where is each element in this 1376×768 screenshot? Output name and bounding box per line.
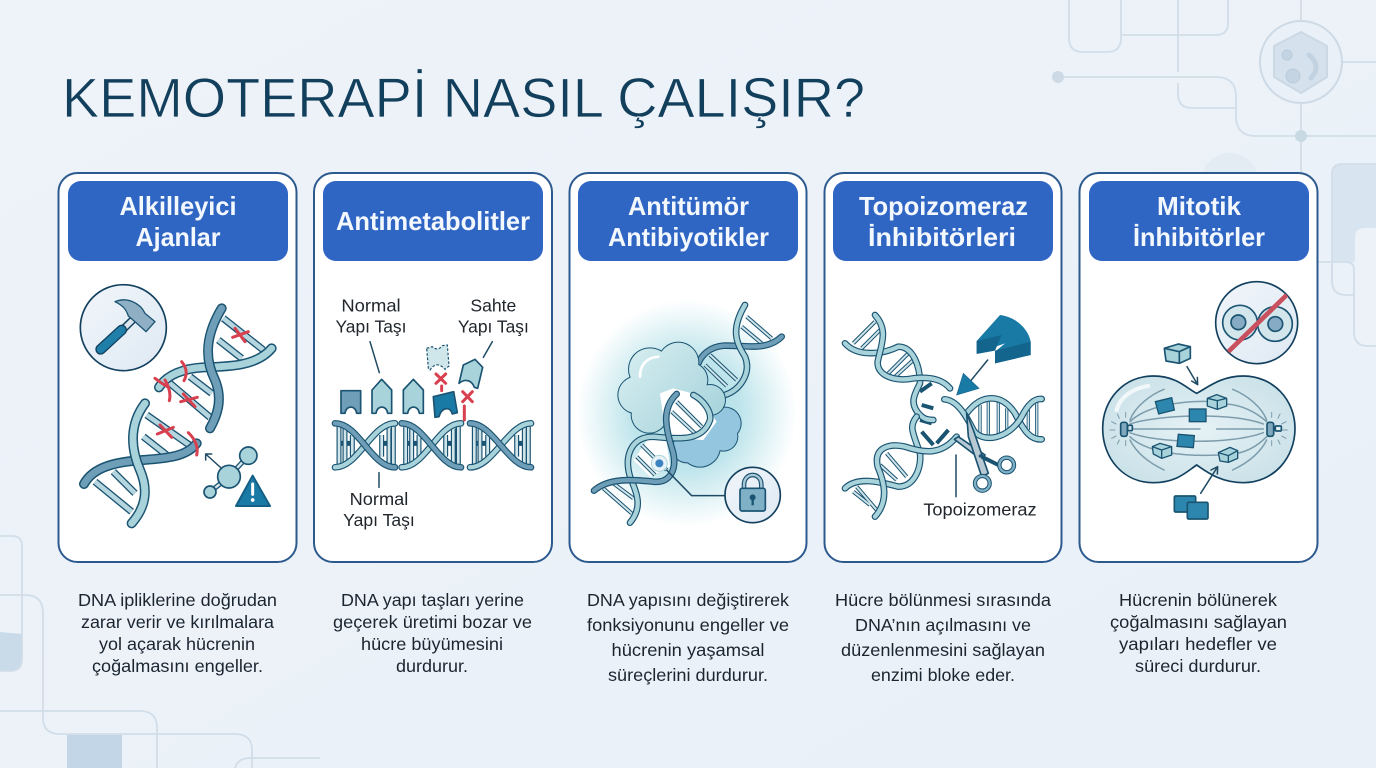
- fake block: [459, 359, 483, 388]
- incoming blocks with arrow: [1174, 467, 1218, 519]
- card 1 frame: [58, 173, 296, 562]
- text: alkilleyici description: yol açarak hücrenin: [99, 634, 255, 654]
- icon: warning triangle: [236, 476, 270, 506]
- light cloud: [617, 342, 726, 434]
- card 4 header: Topoizomeraz: [859, 191, 1028, 221]
- DNA segment 3: [470, 423, 531, 467]
- text: mitotik description: [1110, 590, 1287, 676]
- card 5 frame: [1080, 173, 1318, 562]
- text: mitotik description: süreci durdurur.: [1135, 656, 1261, 676]
- incoming cube with arrow: [1164, 344, 1198, 385]
- normal blocks: [341, 379, 423, 413]
- card 1 header: [68, 181, 288, 261]
- panel: topoizomeraz inhibitörleri: [824, 173, 1062, 562]
- label: normal bottom: Normal: [350, 489, 408, 509]
- card 3 header: Antitümör: [628, 191, 749, 221]
- dark block: [433, 392, 457, 417]
- blue cloud: [672, 407, 742, 468]
- illustration: topoisomerase cutting DNA: [845, 315, 1042, 519]
- text: mitotik description: çoğalmasını sağlayan: [1110, 612, 1287, 632]
- text: topoizomeraz description: düzenlenmesini sağlayan: [841, 640, 1045, 660]
- background circuit decoration, top right: [1052, 0, 1376, 346]
- text: topoizomeraz description: Hücre bölünmesi sırasında: [835, 590, 1051, 610]
- right DNA: [944, 398, 1042, 440]
- lower DNA fragment: [84, 403, 197, 523]
- panel: antitümör antibiyotikler: [570, 173, 806, 562]
- text: antimetabolit description: [333, 590, 532, 676]
- illustration: damaged DNA: [80, 285, 272, 523]
- icon: hammer: [80, 285, 166, 371]
- icon: molecule with arrow: [204, 447, 257, 498]
- icon: scissors: [954, 413, 1014, 491]
- binding site and leader: [651, 455, 725, 496]
- text: antitümör description: [587, 590, 789, 685]
- text: antitümör description: hücrenin yaşamsal: [612, 640, 764, 660]
- label: normal top: Normal: [341, 296, 401, 316]
- panel: alkilleyici ajanlar: [58, 173, 296, 562]
- card 2 frame: [314, 173, 552, 562]
- card 2 header: Antimetabolitler: [336, 206, 530, 236]
- central DNA: [594, 388, 717, 523]
- text: alkilleyici description: [78, 590, 277, 676]
- illustration: building blocks: [335, 296, 531, 530]
- upper DNA: [698, 305, 782, 395]
- label: normal bottom: [343, 473, 415, 530]
- illustration: cell division: [1103, 282, 1298, 519]
- text: topoizomeraz description: DNA’nın açılmasını ve: [855, 615, 1031, 635]
- cubes in cell: [1152, 395, 1238, 462]
- card 1 header: Alkilleyici: [120, 191, 236, 221]
- icon: blocked cell division: [1216, 282, 1298, 364]
- card 3 header: Antibiyotikler: [608, 222, 769, 252]
- label: sahte: Yapı Taşı: [458, 317, 529, 337]
- text: topoizomeraz description: [835, 590, 1051, 685]
- panel: mitotik inhibitörler: [1080, 173, 1318, 562]
- card 4 frame: [824, 173, 1062, 562]
- icon: inhibitor wedge: [977, 315, 1031, 363]
- dashed rejected block: [427, 345, 449, 370]
- DNA segment 2: [402, 423, 461, 467]
- lower left DNA: [845, 417, 957, 517]
- text: mitotik description: Hücrenin bölünerek: [1119, 590, 1277, 610]
- label: topoizomeraz: [923, 455, 1037, 519]
- red marks: [436, 374, 472, 420]
- label: sahte: Sahte: [470, 296, 516, 316]
- card 5 header: İnhibitörler: [1133, 222, 1265, 252]
- card 1 header: Ajanlar: [136, 222, 220, 252]
- text: antimetabolit description: geçerek üretimi bozar ve: [333, 612, 532, 632]
- card 4 header: [833, 181, 1053, 261]
- DNA segment 1: [335, 423, 395, 467]
- text: antimetabolit description: DNA yapı taşları yerine: [341, 590, 524, 610]
- spindle fibres: [1110, 389, 1287, 470]
- label: normal top: [335, 296, 406, 373]
- upper DNA fragment: [159, 308, 272, 428]
- icon: cancer cell: [1260, 21, 1342, 103]
- card 3 frame: [570, 173, 806, 562]
- upper left DNA: [845, 315, 950, 423]
- arrow to DNA: [957, 360, 988, 395]
- illustration: antibiotic on DNA: [577, 300, 797, 527]
- card 4 header: İnhibitörleri: [868, 222, 1016, 252]
- centrosomes: [1121, 422, 1281, 436]
- card 3 header: [578, 181, 798, 261]
- card 5 header: Mitotik: [1157, 191, 1242, 221]
- text: antitümör description: süreçlerini durdurur.: [608, 665, 768, 685]
- text: antimetabolit description: hücre büyümesini: [361, 634, 503, 654]
- text: topoizomeraz description: enzimi bloke eder.: [871, 665, 1015, 685]
- icon: padlock: [725, 467, 780, 523]
- background circuit decoration, bottom left: [0, 536, 320, 768]
- card 5 header: [1089, 181, 1309, 261]
- flat blocks in cell: [1155, 398, 1206, 448]
- label: normal top: Yapı Taşı: [335, 317, 406, 337]
- card 2 header: [323, 181, 543, 261]
- text: alkilleyici description: zarar verir ve kırılmalara: [81, 612, 274, 632]
- red damage marks: [155, 328, 248, 455]
- text: mitotik description: yapıları hedefler ve: [1119, 634, 1277, 654]
- label: sahte: [458, 296, 529, 357]
- label: normal bottom: Yapı Taşı: [343, 510, 415, 530]
- glow: [577, 300, 797, 527]
- title: KEMOTERAPİ NASIL ÇALIŞIR?: [62, 66, 865, 129]
- panel: antimetabolitler: [314, 173, 552, 562]
- dividing cell: [1103, 376, 1295, 483]
- text: alkilleyici description: çoğalmasını engeller.: [92, 656, 263, 676]
- text: antimetabolit description: durdurur.: [396, 656, 468, 676]
- text: antitümör description: DNA yapısını değiştirerek: [587, 590, 789, 610]
- label: topoizomeraz: Topoizomeraz: [923, 499, 1037, 519]
- text: alkilleyici description: DNA ipliklerine doğrudan: [78, 590, 277, 610]
- text: antitümör description: fonksiyonunu engeller ve: [587, 615, 789, 635]
